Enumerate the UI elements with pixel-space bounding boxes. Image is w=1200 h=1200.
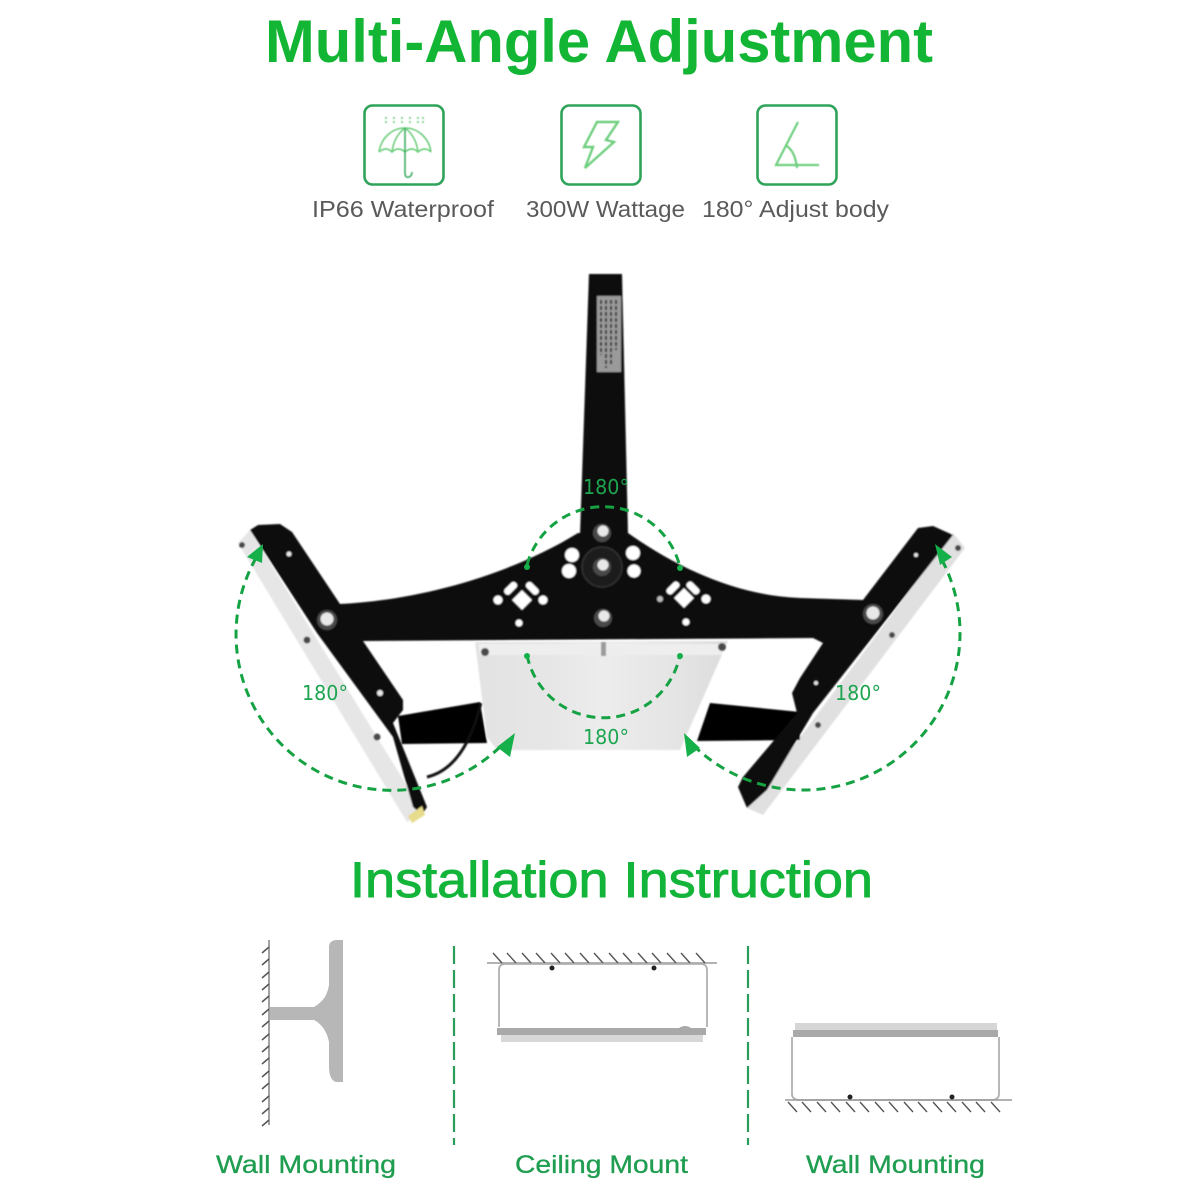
rotation arcs [236,507,960,790]
yellow connector tip [408,806,425,823]
arc arrowheads [247,544,952,757]
angle labels: 180° [302,681,348,705]
angle labels: 180° [835,681,881,705]
diagram: ceiling mount: Ceiling Mount [515,1151,688,1179]
feature: 300W wattage: 300W Wattage [526,196,685,222]
divider [454,946,748,1145]
angle labels [302,475,881,749]
left vent cluster [494,581,548,626]
right lamp edge panel [747,533,965,815]
feature: IP66 waterproof: IP66 Waterproof [312,196,495,222]
arc: left [236,558,503,790]
diagram: ceiling mount [487,953,717,1179]
arc: bottom [527,655,680,718]
feature: 180 degree adjust body: 180° Adjust body [702,196,890,222]
bolts [239,524,961,740]
hub [582,547,622,587]
feature: IP66 waterproof [312,106,495,222]
feature: 300W wattage [526,106,685,222]
centre lamp panel [475,641,728,750]
panel rim highlight [478,644,726,655]
diagram: wall mounting side view: Wall Mounting [216,1151,396,1179]
section heading: Installation Instruction [350,852,873,908]
feature icons row [312,106,890,222]
feature: 180 degree adjust body [702,106,890,222]
diagram: wall mounting front view [785,1023,1012,1179]
diagram: wall mounting front view: Wall Mounting [806,1151,985,1179]
main bracket and arms [250,524,953,815]
arc: right [694,560,960,790]
spec label on stem [597,296,621,372]
arc: top [527,507,680,567]
stem [580,274,628,535]
angle labels: 180° [583,475,629,499]
right vent cluster [657,580,710,626]
angle labels: 180° [583,725,629,749]
vent holes [494,546,710,626]
title: Multi-Angle Adjustment [265,8,933,75]
lower bracket bars [398,702,800,744]
product photo: floodlight with bracket [238,274,965,823]
power cable [427,703,481,777]
left lamp edge panel [238,530,423,822]
diagram: wall mounting side view [216,940,396,1179]
